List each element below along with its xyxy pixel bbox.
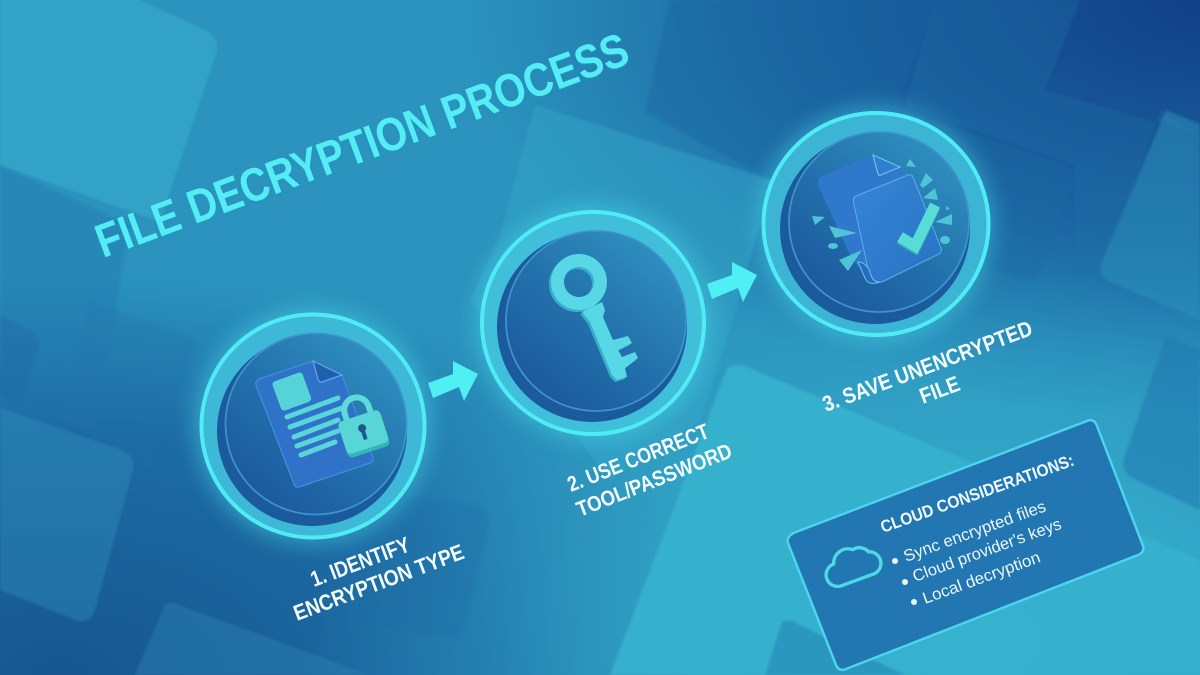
step 3 circle bbox=[758, 106, 994, 342]
step 1 label: ENCRYPTION TYPE bbox=[290, 539, 467, 626]
icon: decrypted file with check bbox=[812, 155, 952, 283]
panel heading: CLOUD CONSIDERATIONS: bbox=[878, 451, 1077, 537]
panel bullet list: Sync encrypted files bbox=[901, 498, 1048, 566]
icon: key bbox=[549, 254, 638, 382]
step 3 label: 3. SAVE UNENCRYPTED bbox=[819, 316, 1036, 417]
step 2 circle bbox=[475, 205, 711, 441]
panel bullet list: Cloud provider's keys bbox=[910, 515, 1064, 586]
step 1 circle bbox=[195, 308, 431, 544]
icon: locked document bbox=[256, 361, 391, 487]
step 1 label: 1. IDENTIFY bbox=[307, 532, 413, 592]
step 2 label: 2. USE CORRECT bbox=[564, 419, 712, 497]
arrow 1 bbox=[428, 361, 478, 401]
panel bullet list bbox=[892, 498, 1064, 608]
step 3 label: FILE bbox=[916, 371, 963, 409]
decorative shards bbox=[812, 159, 952, 271]
step 2 label: TOOL/PASSWORD bbox=[573, 439, 735, 522]
icon: cloud bbox=[819, 539, 884, 590]
panel: cloud considerations bbox=[788, 420, 1143, 670]
arrow 2 bbox=[707, 262, 757, 302]
panel bullet list: Local decryption bbox=[920, 548, 1043, 608]
icon: padlock bbox=[331, 391, 391, 459]
